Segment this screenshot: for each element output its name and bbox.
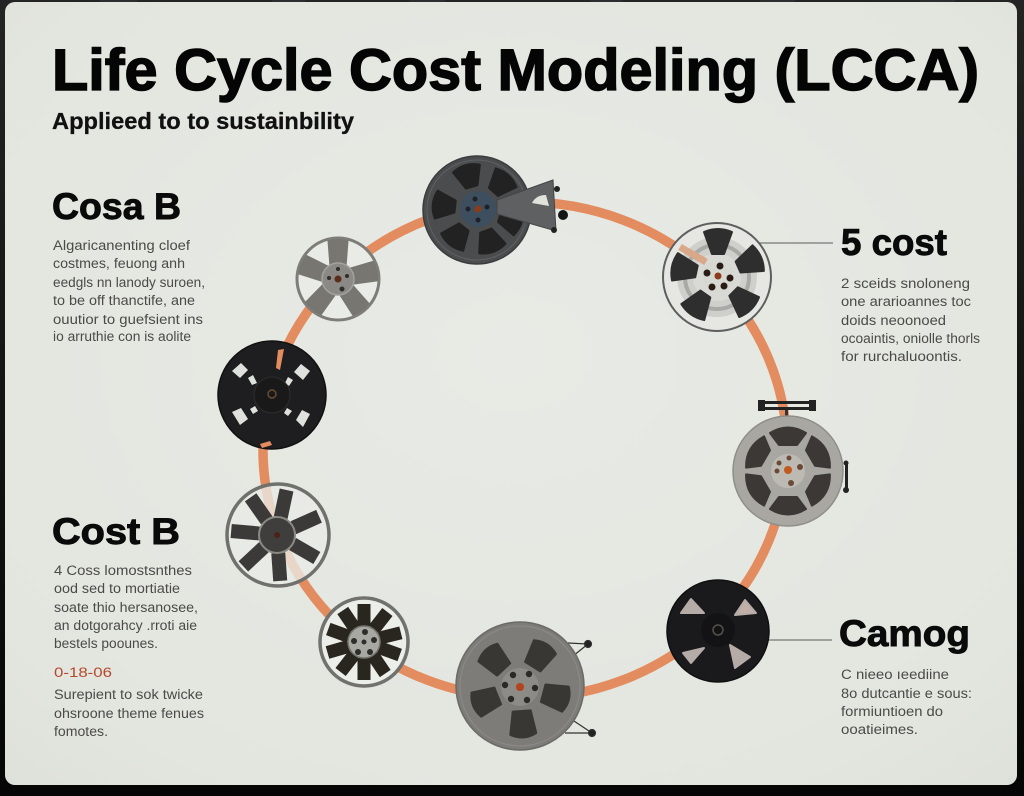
reel 8: black with small windows <box>218 341 326 449</box>
reel 1: top dark with bracket <box>423 156 568 264</box>
body: Camog: formiuntioen do <box>841 704 943 719</box>
body: 5 cost: doids neoonoed <box>841 313 946 328</box>
body: Camog: 8o dutcantie e sous: <box>841 686 972 701</box>
body: Camog: C nieeo ıeediine <box>841 667 949 682</box>
body: Cosa B: to be off thanctife, ane <box>53 293 195 308</box>
body: Cosa B <box>53 238 205 344</box>
subtitle: Applieed to to sustainbility <box>52 108 354 134</box>
body: Cost B: bestels poounes. <box>54 636 158 651</box>
body: Cost B <box>54 563 198 651</box>
body: Cosa B: ouutior to guefsient ins <box>53 312 203 327</box>
date code: 0-18-06 <box>54 664 112 680</box>
body: Cost B note: ohsroone theme fenues <box>54 706 204 721</box>
side pin <box>843 460 849 493</box>
title: Life Cycle Cost Modeling (LCCA) <box>52 38 979 103</box>
body: 5 cost: for rurchaluoontis. <box>841 349 962 364</box>
reel 4: black <box>667 580 769 682</box>
body: Cosa B: eedgls nn lanody suroen, <box>53 275 205 290</box>
body: Cost B: 4 Coss lomostsnthes <box>54 563 192 578</box>
body: Cosa B: Algaricanenting cloef <box>53 238 190 253</box>
body: 5 cost: one ararioannes toc <box>841 294 971 309</box>
reel 3: gray with top bar <box>733 400 849 526</box>
reel 6: ten spokes <box>320 598 408 686</box>
heading: 5 cost: 5 cost <box>841 222 947 263</box>
body: 5 cost: ocoaintis, oniolle thorls <box>841 331 980 346</box>
body: Cost B: ood sed to mortiatie <box>54 581 180 596</box>
text block: Cost B <box>52 511 204 739</box>
reel 9: small gray <box>297 238 379 320</box>
body: Cost B: soate thio hersanosee, <box>54 600 198 615</box>
body: Cost B note: Surepient to sok twicke <box>54 687 203 702</box>
body: Camog: ooatieimes. <box>841 722 918 737</box>
body: Cosa B: costmes, feuong anh <box>53 256 185 271</box>
top bar <box>758 400 816 423</box>
body: Cosa B: io arruthie con is aolite <box>53 329 191 344</box>
body: Cost B: an dotgorahcy .rroti aie <box>54 618 197 633</box>
reel 7: seven spokes <box>227 484 329 586</box>
top film tabs <box>100 0 955 3</box>
heading: Cost B: Cost B <box>52 511 180 552</box>
orange cycle ring <box>263 202 787 698</box>
body: 5 cost <box>841 276 980 364</box>
text block: Cosa B <box>52 186 205 344</box>
bracket <box>497 180 568 233</box>
heading: Cosa B: Cosa B <box>52 186 181 227</box>
body: Cost B note <box>54 687 204 739</box>
reel 5: large gray bottom with wires <box>456 622 596 750</box>
heading: Camog: Camog <box>839 613 970 654</box>
connector lines <box>758 243 833 640</box>
text block: 5 cost <box>841 222 980 364</box>
wires <box>565 640 596 736</box>
text block: Camog <box>839 613 972 737</box>
body: Camog <box>841 667 972 737</box>
body: 5 cost: 2 sceids snoloneng <box>841 276 970 291</box>
reel 2: chrome <box>663 223 771 331</box>
body: Cost B note: fomotes. <box>54 724 108 739</box>
